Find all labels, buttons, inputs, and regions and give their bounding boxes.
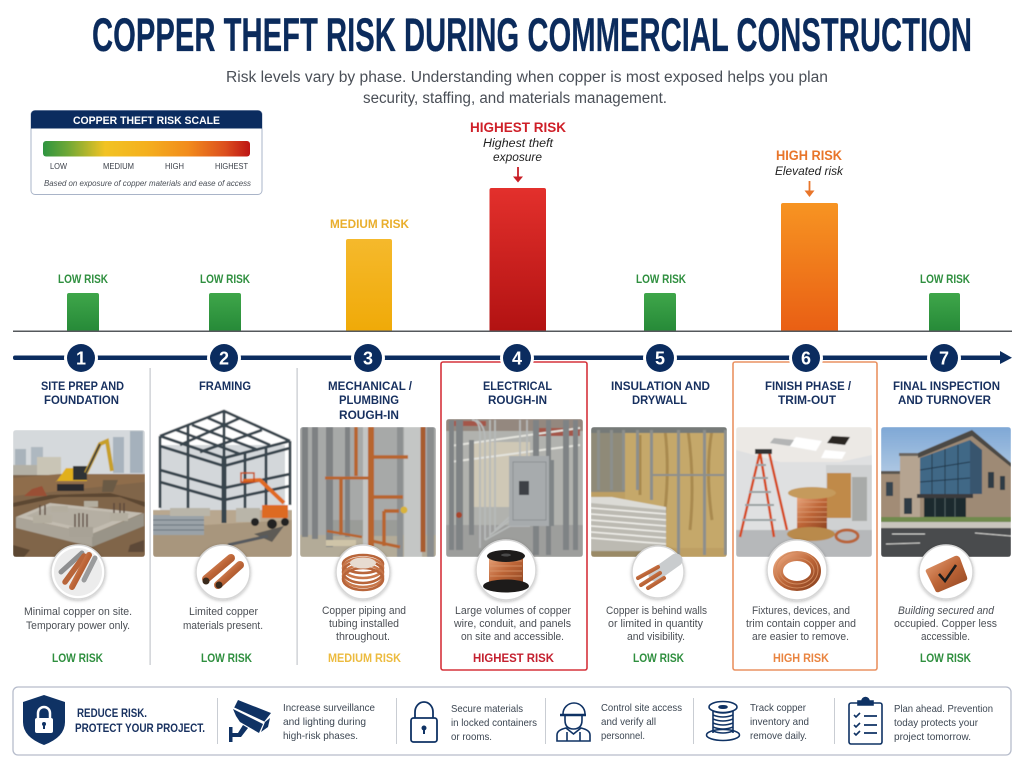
description — [894, 605, 997, 643]
subtitle: Risk levels vary by phase. Understanding when copper is most exposed helps you plan — [226, 69, 828, 86]
phase 5: insulation and drywall — [591, 379, 727, 665]
text: secure materials: in locked containers — [451, 717, 537, 729]
icon: copper wire spool — [476, 540, 536, 600]
text: site access: personnel. — [601, 730, 645, 742]
bar: phase 4 highest — [470, 120, 566, 331]
photo: excavator at foundation — [13, 430, 145, 557]
heading: reduce risk: REDUCE RISK. — [77, 708, 147, 720]
phase 3: mechanical plumbing rough-in — [300, 379, 436, 665]
icon: copper coil ring — [767, 540, 827, 600]
text: secure materials — [451, 703, 537, 743]
text: track copper: inventory and — [750, 716, 809, 728]
description: on site and accessible. — [461, 631, 564, 643]
photo: finished commercial building — [881, 427, 1011, 557]
text: site access: and verify all — [601, 716, 656, 728]
bar: phase 3 medium — [330, 217, 409, 331]
heading: DRYWALL — [632, 393, 687, 407]
text: surveillance: Increase surveillance — [283, 702, 375, 714]
description — [322, 605, 406, 643]
heading: ROUGH-IN — [339, 408, 399, 422]
bar: phase 3 medium: MEDIUM RISK — [330, 217, 409, 231]
bar: phase 6 high — [775, 148, 844, 331]
description: Temporary power only. — [26, 620, 130, 632]
risk label: LOW RISK — [52, 651, 103, 665]
bar chart: risk by phase — [13, 120, 1012, 332]
description: Copper piping and — [322, 605, 406, 617]
timeline arrow with numbered phases: 7 — [939, 348, 949, 368]
bar: phase 1 low — [58, 272, 108, 331]
bar: phase 6 high: Elevated risk — [775, 166, 844, 178]
description: Copper is behind walls — [606, 605, 707, 617]
description: are easier to remove. — [752, 631, 849, 643]
legend: copper theft risk scale: HIGHEST — [215, 162, 248, 171]
text: site access: Control site access — [601, 702, 682, 714]
heading: FOUNDATION — [44, 393, 119, 407]
description: tubing installed — [329, 618, 399, 630]
panel: highest risk highlight — [441, 362, 587, 670]
legend: copper theft risk scale: COPPER THEFT RISK SCALE — [73, 115, 220, 127]
timeline arrow with numbered phases: 4 — [512, 348, 522, 368]
timeline arrow with numbered phases: 5 — [655, 348, 665, 368]
bar: phase 4 highest: exposure — [493, 152, 542, 164]
description: Large volumes of copper — [455, 605, 571, 617]
description: Limited copper — [189, 606, 258, 618]
description: Building secured and — [898, 605, 995, 617]
heading — [893, 379, 1000, 407]
heading: ELECTRICAL — [483, 379, 552, 393]
photo: finish room with ladder and spool — [736, 427, 872, 557]
heading: FINAL INSPECTION — [893, 379, 1000, 393]
risk label: MEDIUM RISK — [328, 651, 401, 665]
description — [606, 605, 707, 643]
phase 6: finish phase / trim-out — [736, 379, 872, 665]
description: occupied. Copper less — [894, 618, 997, 630]
text: surveillance — [283, 702, 375, 742]
icon: security camera — [229, 700, 271, 742]
bar: phase 6 high: HIGH RISK — [776, 148, 842, 163]
heading: FRAMING — [199, 379, 251, 393]
bar: phase 7 low: LOW RISK — [920, 272, 970, 286]
text: plan ahead: project tomorrow. — [894, 731, 971, 743]
text: plan ahead — [894, 703, 993, 743]
description: materials present. — [183, 620, 263, 632]
description: throughout. — [336, 631, 390, 643]
timeline arrow with numbered phases: 2 — [219, 348, 229, 368]
legend: copper theft risk scale: Based on exposure of copper materials and ease of access — [44, 179, 251, 188]
subtitle — [226, 69, 828, 107]
description: wire, conduit, and panels — [453, 618, 571, 630]
bar: phase 4 highest: Highest theft — [483, 138, 554, 150]
text: plan ahead: Plan ahead. Prevention — [894, 703, 993, 715]
phase 2: framing — [153, 379, 292, 665]
risk label: LOW RISK — [633, 651, 684, 665]
phase 4: electrical rough-in — [446, 379, 583, 665]
description: Minimal copper on site. — [24, 606, 132, 618]
description — [183, 606, 263, 632]
icon: copper tubes — [196, 545, 250, 599]
description: and visibility. — [627, 631, 685, 643]
text: surveillance: and lighting during — [283, 716, 366, 728]
timeline arrow with numbered phases: 6 — [801, 348, 811, 368]
description: accessible. — [921, 631, 970, 643]
heading: reduce risk: PROTECT YOUR PROJECT. — [75, 723, 205, 735]
icon: clipboard checklist — [849, 698, 882, 744]
heading: PLUMBING — [339, 393, 399, 407]
text: plan ahead: today protects your — [894, 717, 978, 729]
photo: copper pipes in stud wall — [300, 427, 436, 557]
heading: FINISH PHASE / — [765, 379, 852, 393]
heading: SITE PREP AND — [41, 379, 124, 393]
risk label: HIGHEST RISK — [473, 651, 554, 665]
bar: phase 5 low: LOW RISK — [636, 272, 686, 286]
text: track copper: Track copper — [750, 702, 806, 714]
panel: prevention strip — [13, 687, 1011, 755]
heading: TRIM-OUT — [778, 393, 837, 407]
risk label: HIGH RISK — [773, 651, 829, 665]
risk label: LOW RISK — [920, 651, 971, 665]
description — [746, 605, 856, 643]
timeline arrow with numbered phases: 1 — [76, 348, 86, 368]
heading — [41, 379, 124, 407]
photo: steel frame — [153, 405, 292, 557]
icon: wire spool — [706, 702, 740, 740]
risk label: LOW RISK — [201, 651, 252, 665]
subtitle: security, staffing, and materials management. — [363, 90, 667, 107]
bar: phase 5 low — [636, 272, 686, 331]
icon: copper coil — [336, 545, 390, 599]
legend: copper theft risk scale: LOW — [50, 162, 67, 171]
timeline arrow with numbered phases — [13, 341, 1012, 375]
text: site access — [601, 702, 682, 742]
bar: phase 7 low — [920, 272, 970, 331]
heading: MECHANICAL / — [328, 379, 413, 393]
legend: copper theft risk scale — [31, 110, 262, 194]
bar: phase 2 low — [200, 272, 250, 331]
heading — [328, 379, 413, 422]
heading — [611, 379, 710, 407]
icon: copper and steel rods — [51, 545, 105, 599]
icon: copper plate with check mark — [919, 545, 973, 599]
panel: high risk highlight — [733, 362, 877, 670]
heading: ROUGH-IN — [488, 393, 547, 407]
description — [24, 606, 132, 632]
timeline arrow with numbered phases: 3 — [363, 348, 373, 368]
photo: insulation and drywall stack — [591, 427, 727, 557]
bar: phase 4 highest: HIGHEST RISK — [470, 120, 566, 135]
description: or limited in quantity — [608, 618, 703, 630]
text: secure materials: Secure materials — [451, 703, 523, 715]
heading: reduce risk — [75, 708, 205, 735]
bar: phase 2 low: LOW RISK — [200, 272, 250, 286]
photo: electrical panel and conduit — [446, 419, 583, 557]
icon: padlock — [411, 702, 437, 742]
text: track copper: remove daily. — [750, 730, 807, 742]
description — [453, 605, 571, 643]
legend: copper theft risk scale: HIGH — [165, 162, 184, 171]
heading: AND TURNOVER — [898, 393, 991, 407]
bar: phase 1 low: LOW RISK — [58, 272, 108, 286]
text: secure materials: or rooms. — [451, 731, 492, 743]
description: trim contain copper and — [746, 618, 856, 630]
phase 7: final inspection and turnover — [881, 379, 1011, 665]
description: Fixtures, devices, and — [752, 605, 850, 617]
text: track copper — [750, 702, 809, 742]
legend: copper theft risk scale: MEDIUM — [103, 162, 134, 171]
icon: shield with padlock — [23, 695, 65, 745]
icon: worker in hard hat — [557, 703, 590, 741]
heading: INSULATION AND — [611, 379, 710, 393]
phase 1: site prep and foundation — [13, 379, 145, 665]
heading — [765, 379, 852, 407]
icon: copper cable — [632, 546, 684, 598]
text: surveillance: high-risk phases. — [283, 730, 358, 742]
heading — [483, 379, 552, 407]
